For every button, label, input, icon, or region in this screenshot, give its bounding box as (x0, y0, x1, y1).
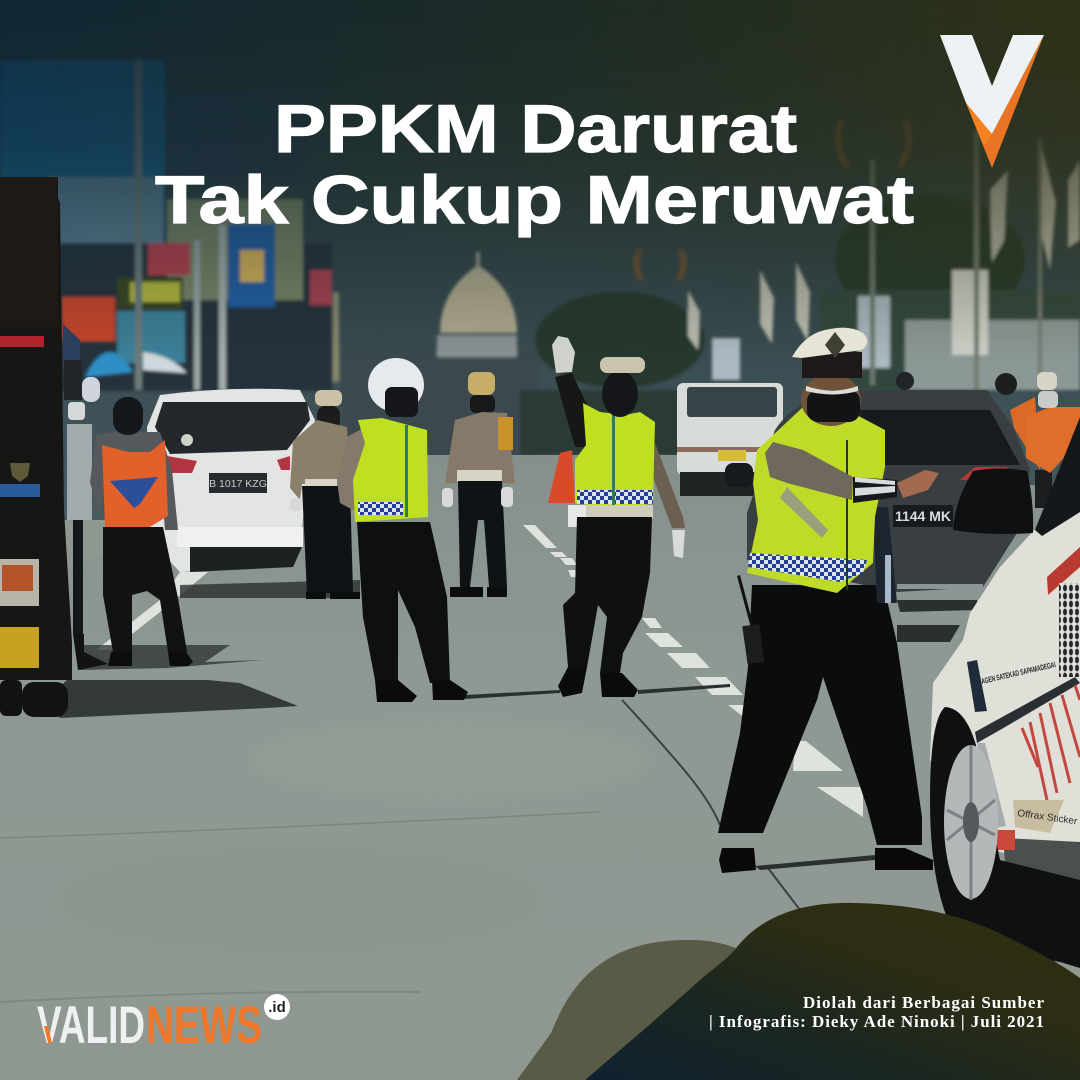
red accent (1047, 547, 1080, 595)
vehicle: dark car (725, 372, 1030, 592)
trousers (718, 585, 922, 845)
background: road surface (0, 455, 1080, 1080)
bottom decorative shape: light olive (517, 940, 760, 1080)
ground shadows (45, 580, 977, 870)
SUV number plate: B 1017 KZG (209, 478, 267, 490)
dark stripe (975, 677, 1080, 743)
side mirror (953, 468, 1033, 534)
cuff (853, 477, 897, 503)
officer: tan uniform centre (442, 372, 515, 597)
logo word VALID: VALID (37, 996, 145, 1055)
hand (897, 470, 939, 498)
fender detail (967, 660, 987, 712)
dark car number plate: 1144 MK (895, 508, 951, 524)
dot pattern (1059, 583, 1080, 677)
lane markings (96, 525, 863, 817)
vehicle: truck at left edge (0, 177, 72, 717)
officer: tan uniform left (290, 390, 360, 599)
logo word NEWS: NEWS (146, 996, 262, 1055)
officer: foreground pointing with lime vest (718, 328, 939, 873)
shoes (719, 848, 933, 873)
officer: white helmet with lime vest (337, 358, 468, 702)
officers: orange vests at right background (995, 372, 1080, 508)
logo accent on V (44, 1026, 52, 1043)
tyre (930, 707, 1080, 968)
credit line 2: | Infografis: Dieky Ade Ninoki | Juli 2021 (709, 1012, 1044, 1031)
credit line 1: Diolah dari Berbagai Sumber (803, 993, 1044, 1012)
peaked cap (792, 328, 867, 378)
title (155, 91, 914, 238)
alloy rim (944, 745, 998, 900)
officer: orange vest left (90, 397, 193, 666)
logo badge .id: .id (268, 999, 286, 1016)
head and mask (801, 374, 861, 426)
officer: raised hand with lime vest (552, 336, 685, 697)
lime vest (747, 407, 885, 593)
bumper (1003, 838, 1080, 882)
credit text (709, 993, 1044, 1031)
vehicle: white pickup (677, 383, 783, 496)
side window (1035, 417, 1080, 536)
car body (930, 417, 1080, 880)
icon: V logo mark (940, 35, 1044, 168)
dark car number plate (893, 505, 953, 527)
traffic cone (548, 450, 575, 503)
background: sky and distant scenery (0, 0, 1080, 520)
red stripes (1022, 685, 1080, 800)
sticker panel: Offrax Sticker (1017, 808, 1079, 827)
title line 2: Tak Cukup Meruwat (155, 162, 914, 238)
far arm (873, 507, 897, 603)
sleeve (765, 442, 853, 500)
title line 1: PPKM Darurat (274, 91, 797, 167)
logo badge .id (264, 994, 290, 1020)
officer: white helmet behind truck (63, 324, 108, 670)
top dark colour overlay (0, 0, 1080, 360)
vehicle: white rally car at right edge (930, 417, 1080, 968)
SUV number plate (209, 473, 267, 493)
bottom decorative shape: dark olive (585, 903, 1080, 1080)
sticker panel (1013, 800, 1079, 833)
vehicle: white SUV (147, 389, 315, 572)
radio and antenna (737, 575, 764, 664)
logo: VALIDNEWS.id (37, 994, 290, 1055)
